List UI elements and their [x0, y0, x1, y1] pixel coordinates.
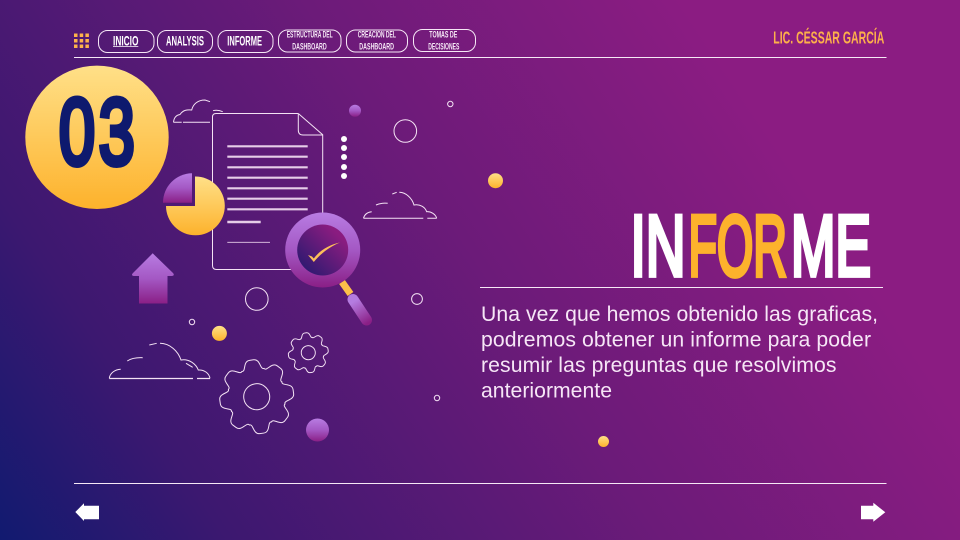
section number badge: 3 — [99, 79, 135, 184]
document text lines — [227, 146, 308, 242]
description text: Una vez que hemos obtenido las graficas, — [481, 303, 878, 326]
nav button: estructura del dashboard — [278, 29, 341, 52]
document — [212, 114, 323, 270]
check mark — [308, 242, 340, 262]
title: informe: ME — [791, 198, 871, 294]
nav button: tomas de decisiones: DECISIONES — [428, 41, 459, 51]
nav button: analysis — [158, 30, 212, 52]
cloud: top left — [174, 100, 223, 122]
navigation bar — [98, 29, 476, 52]
nav button: analysis: ANALYSIS — [166, 33, 204, 48]
menu grid icon — [74, 34, 89, 48]
nav button: estructura del dashboard: DASHBOARD — [292, 41, 327, 51]
pie chart icon — [163, 173, 225, 235]
nav button: estructura del dashboard: ESTRUCTURA DEL — [287, 29, 333, 39]
small gear — [286, 330, 331, 375]
nav button: inicio: INICIO — [113, 33, 138, 48]
title: informe: IN — [630, 198, 686, 294]
magnifying glass with check — [285, 212, 366, 320]
nav button: tomas de decisiones: TOMAS DE — [429, 29, 457, 39]
arrow: next — [861, 503, 885, 522]
dots column — [341, 136, 347, 179]
nav button: creacion del dashboard — [346, 29, 408, 52]
section number badge — [25, 66, 169, 209]
description text: anteriormente — [481, 380, 612, 402]
description text — [481, 303, 878, 402]
cloud: right — [364, 192, 437, 218]
arrow: previous — [75, 503, 99, 521]
author name: LIC. CÉSSAR GARCÍA — [773, 26, 885, 48]
nav button: informe — [218, 30, 273, 52]
outline circles — [189, 101, 453, 401]
title: informe: FOR — [688, 198, 787, 294]
section number badge: 0 — [59, 79, 95, 184]
upload arrow icon — [132, 253, 174, 304]
illustration — [109, 100, 609, 447]
nav button: tomas de decisiones — [414, 29, 476, 52]
cloud: bottom left — [109, 343, 210, 378]
nav button: inicio — [98, 30, 154, 52]
description text: resumir las preguntas que resolvimos — [481, 354, 836, 377]
description text: podremos obtener un informe para poder — [481, 328, 871, 351]
nav button: creacion del dashboard: DASHBOARD — [359, 41, 394, 51]
nav button: informe: INFORME — [227, 33, 262, 48]
decorative spheres — [212, 105, 609, 447]
large gear — [215, 355, 298, 438]
nav button: creacion del dashboard: CREACION DEL — [358, 29, 396, 39]
